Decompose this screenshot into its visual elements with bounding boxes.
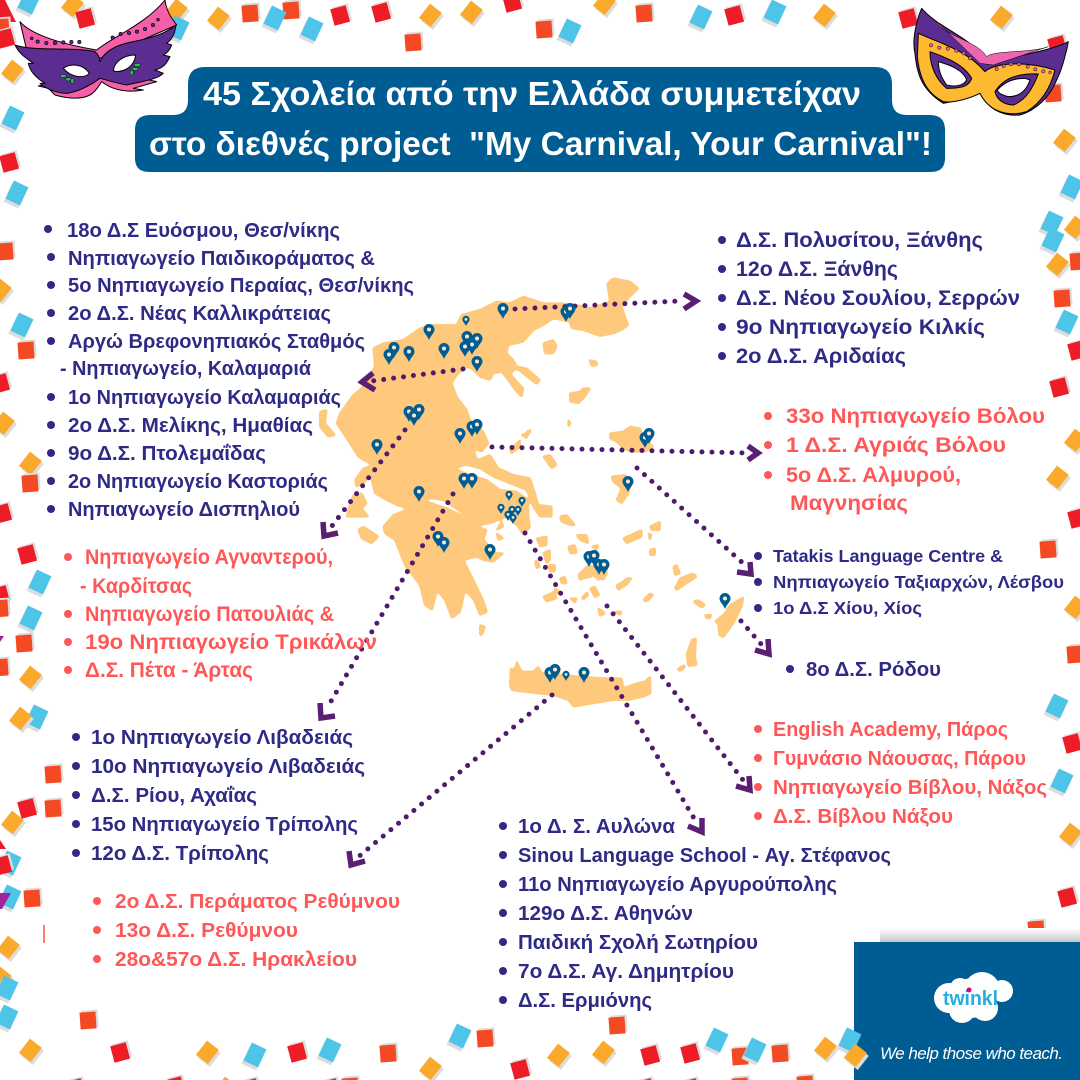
title banner — [135, 67, 945, 172]
list: Livadeia, Achaia, Tripoli schools: Δ.Σ. Ρίου, Αχαΐας — [91, 785, 257, 807]
Crete — [510, 662, 651, 707]
map of Greece — [320, 278, 660, 618]
logo star — [966, 988, 972, 992]
mainland — [337, 278, 638, 535]
list: Crete schools: 2ο Δ.Σ. Περάματος Ρεθύμνου — [115, 891, 400, 913]
list: Karditsa, Trikala, Arta schools: 19ο Νηπιαγωγείο Τρικάλων — [85, 631, 377, 654]
list: Xanthi, Serres, Kilkis schools: Δ.Σ. Νέου Σουλίου, Σερρών — [736, 287, 1020, 310]
list: Crete schools: 13ο Δ.Σ. Ρεθύμνου — [115, 920, 298, 942]
list: Thessaloniki and north-west schools: 18ο Δ.Σ Ευόσμου, Θεσ/νίκης — [67, 220, 340, 242]
list: Attica schools: Sinou Language School - Αγ. Στέφανος — [518, 845, 891, 867]
northern and Ionian islands — [320, 340, 660, 590]
logo wordmark: twinkl — [943, 988, 998, 1010]
icon: gold and purple carnival mask — [914, 8, 1068, 115]
list: Paros and Naxos schools: English Academy, Πάρος — [773, 719, 1008, 741]
list: Livadeia, Achaia, Tripoli schools: 10ο Νηπιαγωγείο Λιβαδειάς — [91, 756, 365, 778]
dotted arrows — [320, 294, 769, 865]
list: Xanthi, Serres, Kilkis schools: 9ο Νηπιαγωγείο Κιλκίς — [736, 316, 985, 339]
tagline: We help those who teach. — [880, 1044, 1063, 1063]
list: Xanthi, Serres, Kilkis schools — [718, 229, 1020, 368]
list: Livadeia, Achaia, Tripoli schools — [72, 727, 365, 865]
icon: purple and pink carnival mask — [15, 0, 177, 98]
list: Crete schools: 28ο&57ο Δ.Σ. Ηρακλείου — [115, 949, 357, 971]
list: Paros and Naxos schools: Γυμνάσιο Νάουσας, Πάρου — [773, 748, 1026, 770]
list: Attica schools: 1ο Δ. Σ. Αυλώνα — [518, 816, 676, 838]
list: Attica schools: 11ο Νηπιαγωγείο Αργυρούπολης — [518, 874, 837, 896]
icon: cloud logo — [934, 972, 1013, 1023]
list: Paros and Naxos schools: Δ.Σ. Βίβλου Νάξου — [773, 806, 953, 828]
list: Paros and Naxos schools: Νηπιαγωγείο Βίβλου, Νάξος — [773, 777, 1047, 799]
list: Thessaloniki and north-west schools: - Νηπιαγωγείο, Καλαμαριά — [60, 358, 312, 380]
list: Magnesia schools: 1 Δ.Σ. Αγριάς Βόλου — [786, 434, 1006, 457]
list: Thessaloniki and north-west schools: 9ο Δ.Σ. Πτολεμαΐδας — [68, 443, 266, 465]
list: Thessaloniki and north-west schools: Αργώ Βρεφονηπιακός Σταθμός — [68, 331, 365, 353]
list: Attica schools: Παιδική Σχολή Σωτηρίου — [518, 932, 758, 954]
list: Paros and Naxos schools — [754, 719, 1047, 828]
list: Xanthi, Serres, Kilkis schools: Δ.Σ. Πολυσίτου, Ξάνθης — [736, 229, 983, 252]
list: Thessaloniki and north-west schools: 1ο Νηπιαγωγείο Καλαμαριάς — [68, 387, 341, 409]
list: Magnesia schools: 5ο Δ.Σ. Αλμυρού, — [786, 464, 961, 487]
list: Karditsa, Trikala, Arta schools — [64, 546, 377, 682]
Euboea — [467, 455, 552, 517]
list: Lesvos and Chios schools — [754, 546, 1064, 618]
subtitle text: στο διεθνές project "My Carnival, Your Carnival"! — [149, 125, 932, 162]
list: Livadeia, Achaia, Tripoli schools: 15ο Νηπιαγωγείο Τρίπολης — [91, 814, 358, 836]
list: Lesvos and Chios schools: 1ο Δ.Σ Χίου, Χίος — [773, 598, 922, 618]
list: Thessaloniki and north-west schools: 5ο Νηπιαγωγείο Περαίας, Θεσ/νίκης — [68, 275, 414, 297]
list: Livadeia, Achaia, Tripoli schools: 1ο Νηπιαγωγείο Λιβαδειάς — [91, 727, 353, 749]
list: Magnesia schools — [764, 405, 1045, 515]
twinkl logo panel — [837, 928, 1080, 1080]
list: Livadeia, Achaia, Tripoli schools: 12ο Δ.Σ. Τρίπολης — [91, 843, 269, 865]
list: Magnesia schools: 33ο Νηπιαγωγείο Βόλου — [786, 405, 1045, 428]
list: Attica schools: Δ.Σ. Ερμιόνης — [518, 990, 652, 1012]
southern islands and Crete — [480, 565, 743, 707]
location pins — [372, 303, 730, 683]
list: Karditsa, Trikala, Arta schools: Νηπιαγωγείο Πατουλιάς & — [85, 603, 334, 626]
list: Karditsa, Trikala, Arta schools: - Καρδίτσας — [80, 575, 192, 598]
list: Attica schools: 129ο Δ.Σ. Αθηνών — [518, 903, 693, 925]
list: Karditsa, Trikala, Arta schools: Δ.Σ. Πέτα - Άρτας — [85, 659, 253, 682]
Peloponnese — [383, 502, 503, 618]
list: Thessaloniki and north-west schools: Νηπιαγωγείο Δισπηλιού — [68, 499, 300, 521]
list: Rhodes school: 8ο Δ.Σ. Ρόδου — [806, 659, 941, 681]
list: Attica schools — [499, 816, 891, 1012]
list: Thessaloniki and north-west schools — [44, 220, 414, 521]
list: Xanthi, Serres, Kilkis schools: 2ο Δ.Σ. Αριδαίας — [736, 345, 906, 368]
title text: 45 Σχολεία από την Ελλάδα συμμετείχαν — [203, 75, 861, 112]
list: Thessaloniki and north-west schools: 2ο Νηπιαγωγείο Καστοριάς — [68, 471, 328, 493]
list: Thessaloniki and north-west schools: 2ο Δ.Σ. Μελίκης, Ημαθίας — [68, 415, 313, 437]
list: Magnesia schools: Μαγνησίας — [790, 492, 908, 515]
list: Lesvos and Chios schools: Νηπιαγωγείο Ταξιαρχών, Λέσβου — [773, 572, 1064, 593]
list: Karditsa, Trikala, Arta schools: Νηπιαγωγείο Αγναντερού, — [85, 546, 333, 569]
list: Lesvos and Chios schools: Tatakis Language Centre & — [773, 546, 1003, 566]
list: Attica schools: 7ο Δ.Σ. Αγ. Δημητρίου — [518, 961, 734, 983]
list: Thessaloniki and north-west schools: Νηπιαγωγείο Παιδικοράματος & — [68, 248, 375, 270]
list: Thessaloniki and north-west schools: 2ο Δ.Σ. Νέας Καλλικράτειας — [68, 303, 331, 325]
list: Crete schools — [93, 891, 400, 971]
list: Xanthi, Serres, Kilkis schools: 12ο Δ.Σ. Ξάνθης — [736, 258, 898, 281]
